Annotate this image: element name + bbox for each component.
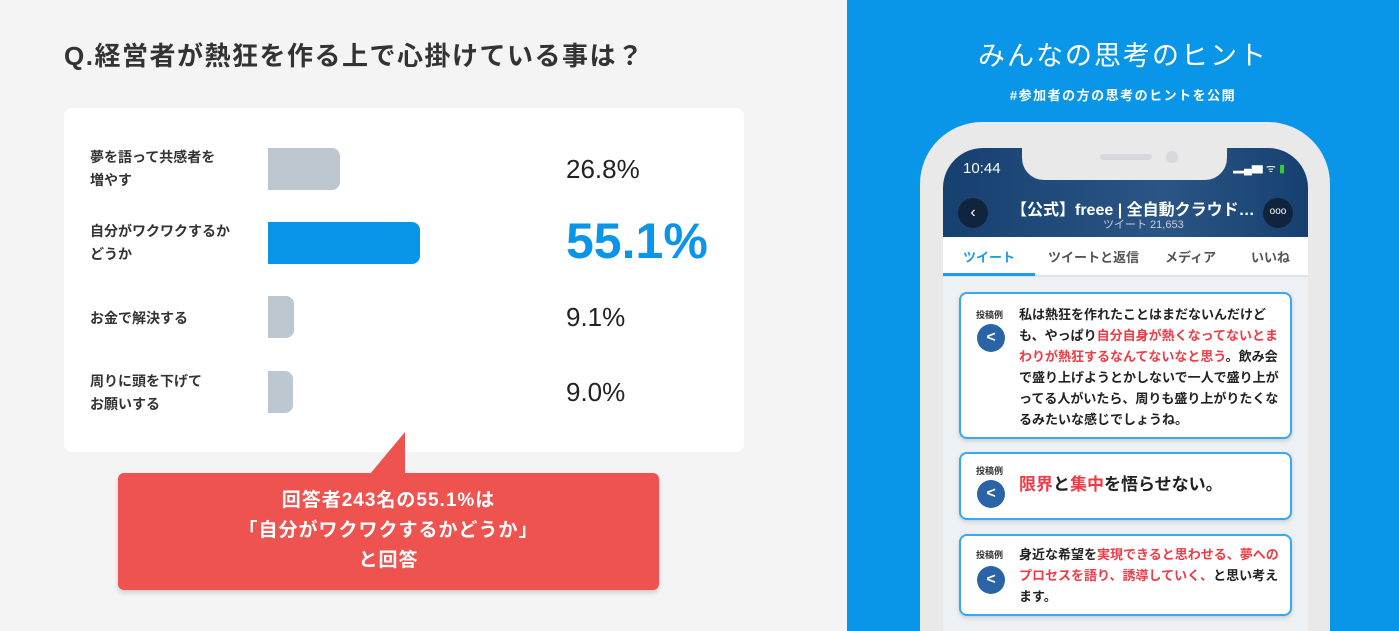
right heading: みんなの思考のヒント xyxy=(978,41,1268,71)
label 3: お金で解決する xyxy=(90,310,188,326)
callout: と回答 xyxy=(358,550,418,571)
pct 2: 55.1% xyxy=(566,213,708,269)
label 4 xyxy=(90,373,202,412)
tabs: メディア xyxy=(1165,250,1216,265)
card 2: < xyxy=(986,485,996,502)
screen: 10:44 xyxy=(963,160,1001,177)
label 1 xyxy=(90,149,215,188)
screen: ooo xyxy=(1270,206,1286,217)
card 3: < xyxy=(986,571,996,588)
card 2: 限界と集中を悟らせない。 xyxy=(1019,475,1223,494)
card 3: 身近な希望を実現できると思わせる、夢へのプロセスを語り、誘導していく、と思い考えます。 xyxy=(1019,547,1279,604)
card 1: 投稿例 xyxy=(976,310,1003,320)
callout: 「自分がワクワクするかどうか」 xyxy=(238,520,538,541)
card 1 xyxy=(959,292,1292,439)
tabs: いいね xyxy=(1251,250,1290,265)
screen: ツイート 21,653 xyxy=(1103,219,1184,231)
card 2 xyxy=(959,452,1292,520)
callout xyxy=(116,432,660,594)
pct 4: 9.0% xyxy=(566,377,625,407)
card 2: 投稿例 xyxy=(976,466,1003,476)
phone xyxy=(920,122,1330,631)
bar 4 xyxy=(268,371,293,413)
pct 1: 26.8% xyxy=(566,154,640,184)
subheading: #参加者の方の思考のヒントを公開 xyxy=(1010,88,1236,103)
card 1: 私は熱狂を作れたことはまだないんだけども、やっぱり自分自身が熱くなってないとまわりが熱狂するなんてないなと思う。飲み会で盛り上げようとかしないで一人で盛り上がってる人がいたら、周りも盛り上がりたくなるみたいな感じでしょうね。 xyxy=(1019,307,1279,427)
tabs: ツイートと返信 xyxy=(1048,250,1139,265)
bar 3 xyxy=(268,296,294,338)
label 1: 増やす xyxy=(90,172,132,188)
screen xyxy=(943,148,1308,631)
card 3 xyxy=(959,534,1292,616)
title: Q.経営者が熱狂を作る上で心掛けている事は？ xyxy=(64,41,644,71)
label 4: 周りに頭を下げて xyxy=(90,373,202,389)
label 2: 自分がワクワクするか xyxy=(90,223,230,239)
pct 3: 9.1% xyxy=(566,302,625,332)
label 4: お願いする xyxy=(90,396,160,412)
card 3: 投稿例 xyxy=(976,550,1003,560)
header xyxy=(943,148,1308,237)
screen: ▂▄▆ ᯤ ▮ xyxy=(1233,163,1285,175)
screen: 【公式】freee | 全自動クラウド… xyxy=(1011,202,1255,219)
label 2: どうか xyxy=(90,246,132,262)
tabs xyxy=(943,237,1308,277)
bar 1 xyxy=(268,148,340,190)
label 2 xyxy=(90,223,230,262)
screen: ‹ xyxy=(970,204,976,221)
callout: 回答者243名の55.1%は xyxy=(282,490,495,511)
card 1: < xyxy=(986,329,996,346)
right panel background xyxy=(847,0,1399,631)
panel: survey results xyxy=(64,108,744,452)
tabs: ツイート xyxy=(963,250,1015,265)
label 1: 夢を語って共感者を xyxy=(90,149,215,165)
bar 2 xyxy=(268,222,420,264)
notch xyxy=(1022,142,1227,180)
